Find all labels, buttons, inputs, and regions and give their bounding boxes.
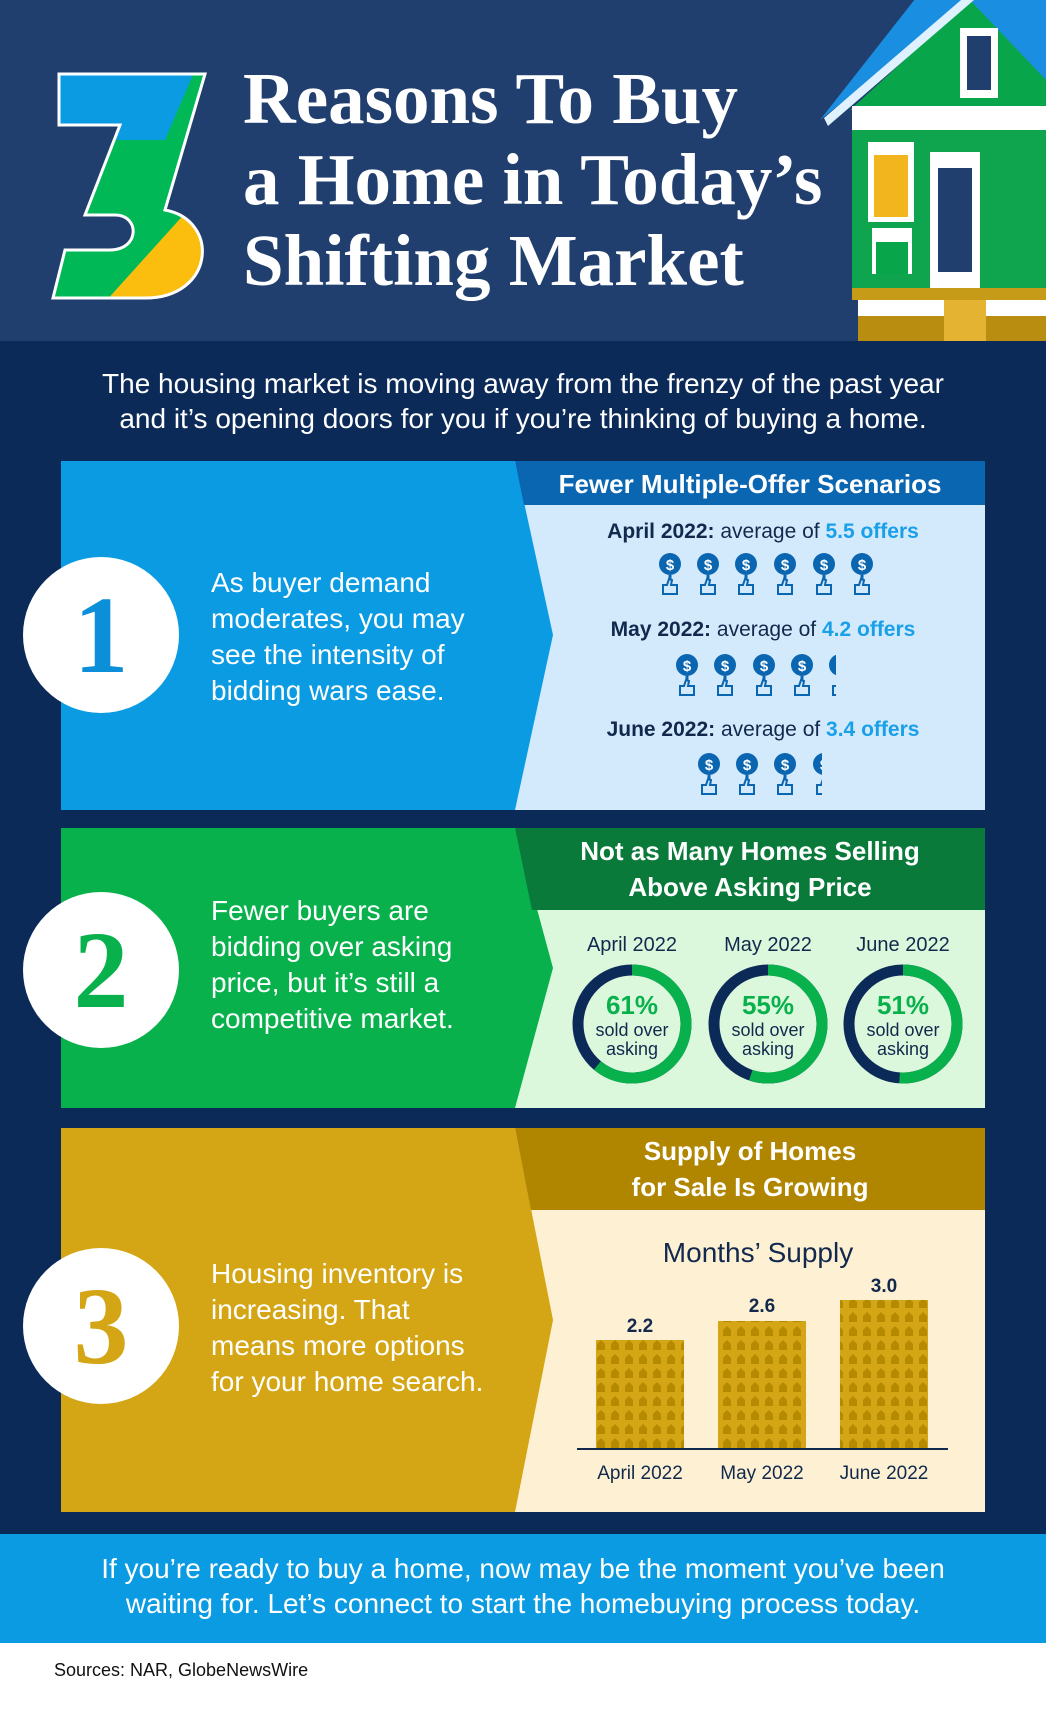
reason 3 text: increasing. That — [211, 1294, 410, 1325]
number circle 2: 2 — [74, 909, 128, 1031]
intro text — [102, 368, 944, 434]
number circle 2 — [23, 892, 179, 1048]
offers rows — [607, 520, 919, 741]
reason 1 text: bidding wars ease. — [211, 675, 444, 706]
offers rows: June 2022: average of 3.4 offers — [607, 718, 919, 741]
heading 1: Fewer Multiple-Offer Scenarios — [559, 469, 941, 499]
bar chart: 2.6 — [749, 1296, 775, 1317]
bar chart: Months’ Supply — [663, 1237, 853, 1268]
bar chart: 3.0 — [871, 1276, 897, 1297]
panel: reason 1 — [23, 461, 985, 810]
donut charts: asking — [877, 1039, 929, 1059]
heading 2: Not as Many Homes Selling — [580, 836, 920, 866]
bar chart: 2.2 — [627, 1316, 653, 1337]
reason 2 text: Fewer buyers are — [211, 895, 429, 926]
footer call to action: waiting for. Let’s connect to start the homebuying process today. — [126, 1588, 920, 1619]
intro text: and it’s opening doors for you if you’re thinking of buying a home. — [119, 403, 927, 434]
heading 3: Supply of Homes — [644, 1136, 856, 1166]
title: a Home in Today’s — [243, 139, 822, 220]
icon: house — [820, 0, 1046, 341]
number circle 3 — [23, 1248, 179, 1404]
reason 1 text: see the intensity of — [211, 639, 444, 670]
number circle 1: 1 — [74, 574, 128, 696]
bar chart: April 2022 — [597, 1463, 683, 1484]
title: Shifting Market — [243, 220, 744, 301]
offers rows: May 2022: average of 4.2 offers — [611, 618, 915, 641]
reason 1 text: moderates, you may — [211, 603, 465, 634]
title: Reasons To Buy — [243, 58, 738, 139]
heading 2 — [580, 836, 920, 902]
panel: reason 2 — [23, 828, 985, 1108]
panel: reason 3 — [23, 1128, 985, 1512]
reason 2 text: price, but it’s still a — [211, 967, 439, 998]
donut charts — [572, 934, 962, 1084]
reason 2 text: bidding over asking — [211, 931, 452, 962]
reason 3 text: Housing inventory is — [211, 1258, 463, 1289]
header background — [0, 0, 1046, 341]
bar chart — [577, 1237, 948, 1484]
donut charts: 61% — [606, 990, 658, 1020]
donut charts: sold over — [731, 1020, 805, 1040]
donut charts: April 2022 — [587, 934, 677, 956]
footer call to action — [0, 1534, 1046, 1643]
reason 1 text: As buyer demand — [211, 567, 430, 598]
icons: offers — [659, 553, 873, 795]
bar chart: May 2022 — [720, 1463, 804, 1484]
footer call to action: If you’re ready to buy a home, now may be the moment you’ve been — [101, 1553, 945, 1584]
sources: Sources: NAR, GlobeNewsWire — [54, 1660, 308, 1680]
donut charts: May 2022 — [724, 934, 812, 956]
heading 3: for Sale Is Growing — [632, 1172, 868, 1202]
body background — [0, 341, 1046, 1534]
heading 2: Above Asking Price — [628, 872, 872, 902]
donut charts: June 2022 — [856, 934, 950, 956]
reason 2 text: competitive market. — [211, 1003, 454, 1034]
icon: big number 3 — [51, 72, 207, 300]
heading 3 — [632, 1136, 868, 1202]
number circle 3: 3 — [74, 1265, 128, 1387]
donut charts: asking — [606, 1039, 658, 1059]
donut charts: 55% — [742, 990, 794, 1020]
donut charts: sold over — [595, 1020, 669, 1040]
intro text: The housing market is moving away from the frenzy of the past year — [102, 368, 944, 399]
reason 1 text — [211, 567, 465, 706]
offers rows: April 2022: average of 5.5 offers — [607, 520, 919, 543]
donut charts: 51% — [877, 990, 929, 1020]
reason 3 text: for your home search. — [211, 1366, 483, 1397]
bar chart: June 2022 — [840, 1463, 928, 1484]
reason 3 text — [211, 1258, 483, 1397]
donut charts: asking — [742, 1039, 794, 1059]
number circle 1 — [23, 557, 179, 713]
reason 2 text — [211, 895, 454, 1034]
donut charts: sold over — [866, 1020, 940, 1040]
reason 3 text: means more options — [211, 1330, 465, 1361]
title — [243, 58, 822, 301]
